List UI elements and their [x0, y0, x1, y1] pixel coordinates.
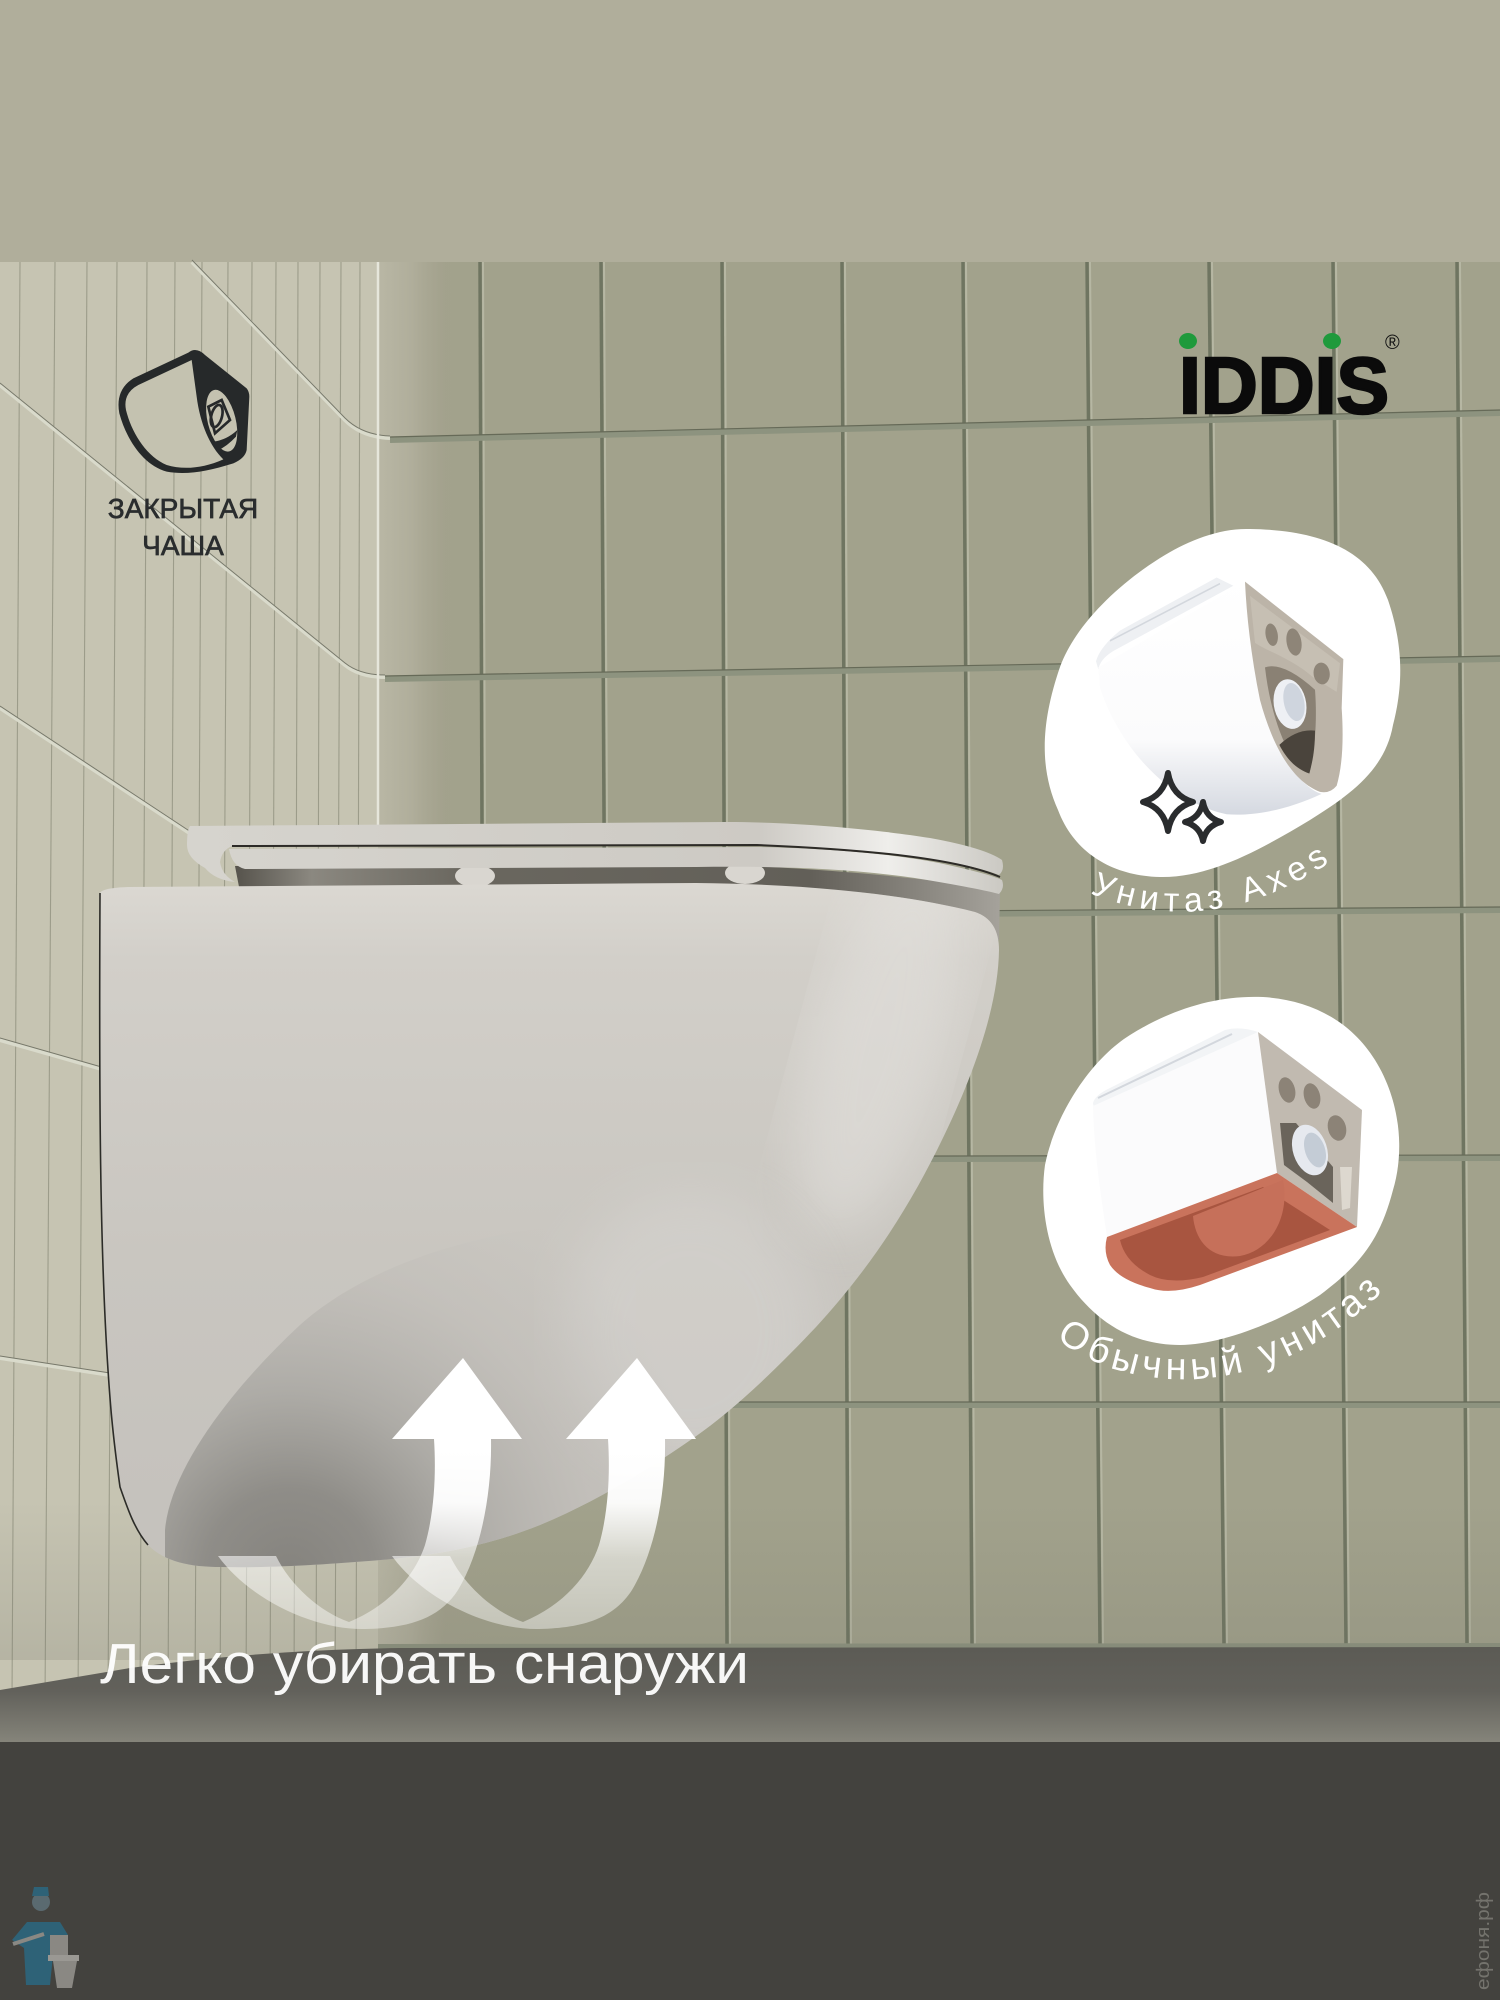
toilet seat ring — [229, 847, 1003, 894]
watermark: site name: ефоня.рф — [1473, 1892, 1493, 1990]
tiled side wall — [0, 260, 390, 1702]
orange bottom — [1106, 1173, 1357, 1291]
dark bottom band — [0, 1742, 1500, 2000]
toilet bowl — [98, 883, 999, 1568]
label: ordinary toilet: Обычный унитаз — [1062, 1280, 1380, 1380]
arrow 2 — [392, 1358, 696, 1629]
panel: ordinary toilet — [1043, 996, 1400, 1380]
icon: sparkles — [1143, 773, 1221, 841]
toilet gap behind seat — [235, 864, 1000, 940]
wall hung toilet — [100, 822, 1003, 1600]
arrow 1 — [218, 1358, 522, 1629]
panel: Axes toilet — [1044, 529, 1400, 912]
logo: IDDIS: IDDIS — [1179, 341, 1389, 430]
arrows: clean outside — [218, 1358, 696, 1629]
seat bumpers — [455, 862, 765, 887]
icon label: ЗАКРЫТАЯ — [108, 493, 258, 524]
mini toilet: open rim — [1093, 1028, 1362, 1291]
caption: clean outside: Легко убирать снаружи — [100, 1632, 749, 1696]
icon label: ЧАША — [142, 530, 224, 561]
toilet lid — [187, 822, 1003, 882]
tiled back wall — [378, 262, 1500, 1652]
white blob 2 — [1043, 997, 1399, 1345]
mini toilet: closed bowl — [1096, 578, 1343, 815]
icon: closed bowl — [119, 350, 249, 473]
white blob 1 — [1045, 529, 1400, 877]
icon label — [108, 493, 258, 561]
floor — [0, 1647, 1500, 1742]
top beige band — [0, 0, 1500, 262]
logo: IDDIS: ® — [1385, 332, 1400, 354]
watermark: plumber figure — [12, 1887, 79, 1988]
label: Axes toilet: Унитаз Axes — [1092, 850, 1327, 912]
